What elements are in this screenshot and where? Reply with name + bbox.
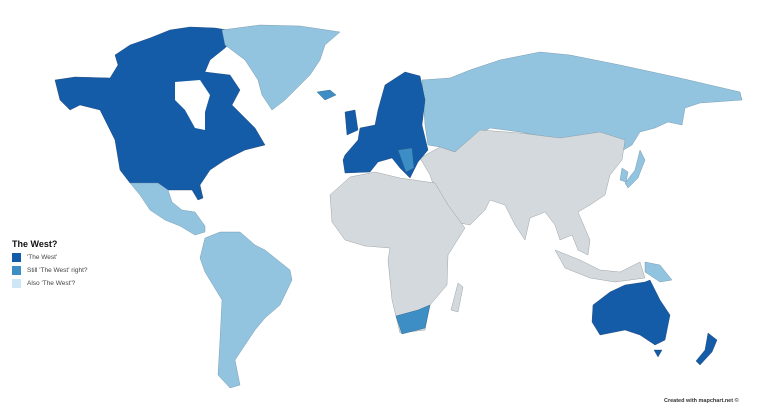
legend item: The West <box>12 253 57 262</box>
region: Greenland <box>222 25 340 110</box>
region: Australia & New Zealand <box>592 280 717 365</box>
region: Japan, Korea, PNG <box>620 150 672 282</box>
region: Iceland <box>317 90 336 100</box>
legend item: Also: Also 'The West'? <box>27 280 75 287</box>
legend title: The West? <box>12 239 57 249</box>
region: Europe (The West) <box>343 72 428 178</box>
region: North America (The West) <box>55 27 265 200</box>
legend item: Also <box>12 279 75 288</box>
region: Africa <box>330 172 465 333</box>
legend item: Still: Still 'The West' right? <box>27 267 88 274</box>
legend item: The West: 'The West' <box>27 254 57 261</box>
region: Asia/Middle East <box>420 130 645 282</box>
legend <box>12 239 88 288</box>
credit: Created with mapchart.net © <box>664 398 739 404</box>
region: Balkans (Still the West) <box>398 148 414 172</box>
region: Russia <box>422 52 742 152</box>
region: South Africa <box>396 305 430 334</box>
region: Madagascar <box>451 283 463 312</box>
region: Latin America <box>130 183 292 388</box>
legend item: Still <box>12 266 88 275</box>
